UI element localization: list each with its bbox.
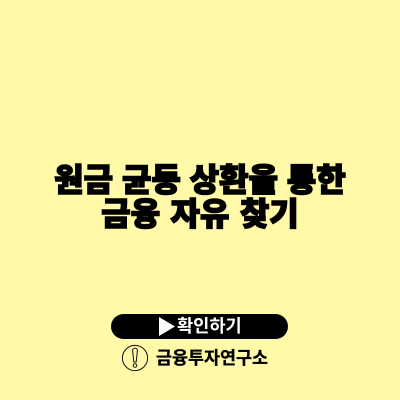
button label: 확인하기 xyxy=(177,316,242,336)
icon: exclamation circle xyxy=(122,344,148,372)
brand name: 금융투자연구소 xyxy=(156,348,268,368)
icon: play triangle xyxy=(159,317,175,336)
title: 금융 자유 찾기 xyxy=(101,196,299,232)
title: 원금 균등 상환을 통한 xyxy=(54,162,346,198)
brand xyxy=(122,344,268,372)
title xyxy=(54,162,346,232)
button: confirm xyxy=(111,314,288,339)
